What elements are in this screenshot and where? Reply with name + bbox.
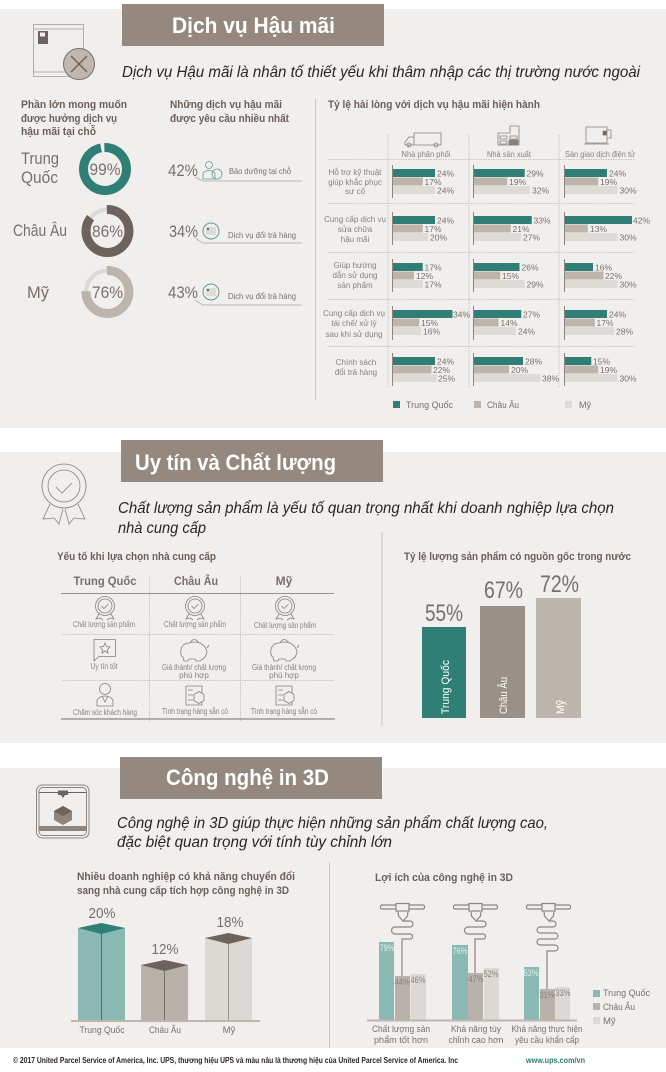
row: usage guidance: 22%	[605, 271, 622, 281]
subheading: benefits: Lợi ích của công nghệ in 3D	[375, 872, 513, 884]
group: better customization: 52%	[484, 969, 499, 980]
intro text: Chất lượng sản phẩm là yếu tố quan trọng nhất khi doanh nghiệp lựa chọn	[118, 499, 614, 517]
row 2 labels: Giá thành/ chất lượng	[252, 663, 316, 672]
legend	[393, 400, 591, 410]
subheading: on-site service preference: được hưởng dịch vụ	[21, 113, 117, 125]
group: better customization: chỉnh cao hơn	[448, 1035, 504, 1045]
row: recycling: 14%	[500, 318, 518, 328]
row: return policy: 24%	[437, 356, 454, 366]
subheading: switching suppliers	[77, 871, 295, 897]
row 3 labels: Tình trạng hàng sẵn có	[251, 707, 317, 716]
row: return policy: 38%	[542, 374, 559, 384]
bar chart: domestic sourcing	[404, 551, 631, 718]
donut: Trung Quốc 99%	[21, 148, 126, 190]
icon: 3D printer	[36, 785, 89, 838]
row: repair service: 17%	[424, 224, 442, 234]
row 3 labels: Tình trạng hàng sẵn có	[162, 707, 228, 716]
column headers: Mỹ	[276, 574, 293, 588]
icon: quality medal	[42, 464, 86, 524]
row: repair service: 21%	[512, 224, 530, 234]
group: better product quality: 46%	[410, 975, 426, 986]
row: repair service: 33%	[534, 216, 551, 226]
row: usage guidance: 17%	[424, 262, 442, 272]
icon: piggy bank	[181, 640, 209, 661]
footer website: www.ups.com/vn	[525, 1056, 585, 1065]
bar: Mỹ 18%: 18%	[216, 914, 244, 931]
row: return policy: 28%	[525, 356, 542, 366]
row 2 labels: phù hợp	[269, 671, 299, 680]
icon: piggy bank	[271, 640, 299, 661]
row: recycling: 24%	[518, 326, 535, 336]
row: recycling: 17%	[596, 318, 614, 328]
group: urgent requests: yêu cầu khẩn cấp	[515, 1035, 579, 1045]
row: usage guidance: 29%	[526, 280, 544, 290]
heading: 3D printing	[120, 757, 382, 799]
row: return policy: 25%	[438, 374, 455, 384]
column headers: Châu Âu	[174, 573, 218, 588]
subheading: selection factors: Yếu tố khi lựa chọn nhà cung cấp	[57, 551, 216, 563]
row: technical support: 24%	[437, 168, 454, 178]
row 2 labels: Uy tín tốt	[90, 662, 118, 671]
row: usage guidance: Giúp hướng	[333, 261, 377, 270]
icon: box with tools	[34, 24, 94, 80]
bar chart: switching suppliers	[71, 871, 295, 1036]
donut: Mỹ 76%: 76%	[92, 283, 123, 302]
row: technical support: 32%	[532, 186, 549, 196]
row: usage guidance: 12%	[416, 271, 433, 281]
bar: Trung Quốc 55%: Trung Quốc	[440, 660, 452, 714]
icon: checklist with box	[276, 686, 294, 705]
group: urgent requests: 33%	[556, 988, 571, 999]
donut: Trung Quốc 99%: Trung	[21, 149, 59, 168]
bar: Châu Âu 67%: 67%	[484, 577, 523, 604]
row 2 labels	[90, 662, 316, 680]
bar: Mỹ 72%: Mỹ	[555, 700, 567, 714]
row: recycling: 27%	[523, 310, 540, 320]
intro text: nhà cung cấp	[118, 520, 206, 537]
selection factors table	[57, 551, 335, 722]
row: technical support: 19%	[509, 177, 526, 187]
intro text: Dịch vụ Hậu mãi là nhân tố thiết yếu khi thâm nhập các thị trường nước ngoài	[122, 64, 640, 81]
satisfaction matrix	[323, 99, 650, 410]
stat: 34% return service: Dịch vụ đổi trả hàng	[228, 231, 296, 240]
donut: Mỹ 76%	[27, 270, 129, 314]
subheading: domestic sourcing: Tỷ lệ lượng sản phẩm có nguồn gốc trong nước	[404, 551, 631, 563]
subheading: switching suppliers: sang nhà cung cấp tích hợp công nghệ in 3D	[77, 885, 289, 897]
row: usage guidance: sản phẩm	[337, 281, 373, 290]
icon: medal	[96, 596, 114, 620]
row: repair service: 27%	[523, 232, 540, 242]
footer copyright: © 2017 United Parcel Service of America, Inc. UPS, thương hiệu UPS và màu nâu là thương hiệu của United Parcel Service of America. Inc	[13, 1056, 458, 1065]
intro text	[117, 814, 548, 851]
group: better customization: 47%	[468, 974, 484, 985]
legend: Trung Quốc	[603, 988, 650, 999]
stat: 43% return service	[168, 283, 302, 305]
icon: monitor	[584, 127, 611, 144]
legend: Trung Quốc	[406, 400, 453, 410]
subheading: most requested services: được yêu cầu nhiều nhất	[170, 113, 289, 125]
row: recycling: 34%	[453, 310, 470, 320]
heading: reputation and quality: Uy tín và Chất lượng	[135, 450, 336, 475]
heading: after-sales service	[122, 4, 384, 46]
group: better customization: Khả năng tùy	[451, 1024, 501, 1034]
row: technical support: 24%	[437, 186, 454, 196]
row: recycling: 24%	[609, 310, 626, 320]
row: return policy: 20%	[511, 365, 528, 375]
row 1 labels: Chất lượng sản phẩm	[164, 620, 226, 629]
bar: Trung Quốc 55%: 55%	[425, 600, 463, 627]
legend	[593, 988, 650, 1027]
row: return policy: 15%	[593, 356, 610, 366]
column headers	[74, 573, 293, 588]
stat: 43% return service: 43%	[168, 283, 198, 302]
row: return policy: đổi trả hàng	[335, 368, 377, 377]
row: technical support: 24%	[609, 168, 626, 178]
stat: 34% return service	[169, 222, 302, 243]
bar chart: benefits of 3D printing	[367, 872, 650, 1045]
icon: medal	[186, 596, 204, 620]
row: repair service: hậu mãi	[341, 235, 369, 244]
group: better customization	[448, 904, 504, 1045]
intro text	[118, 499, 614, 537]
row: usage guidance: dẫn sử dụng	[333, 271, 377, 280]
heading: 3D printing: Công nghệ in 3D	[166, 765, 329, 790]
row: return policy	[335, 353, 637, 386]
bar: Châu Âu 67%: Châu Âu	[497, 677, 510, 714]
row: repair service: 13%	[590, 224, 607, 234]
group: urgent requests: 31%	[540, 990, 555, 1001]
row: repair service: 30%	[620, 232, 637, 242]
bar: Mỹ 72%	[536, 571, 581, 718]
row: usage guidance: 15%	[502, 271, 519, 281]
row 1 labels: Chất lượng sản phẩm	[254, 621, 316, 630]
bar: Trung Quốc 55%	[422, 600, 466, 718]
group: better product quality: Chất lượng sản	[372, 1024, 430, 1034]
row 1 labels	[73, 620, 316, 630]
row 3 labels	[73, 707, 317, 717]
row: recycling: Cung cấp dịch vụ	[323, 309, 385, 318]
row: technical support	[328, 165, 637, 198]
column headers: Nhà sản xuất	[487, 150, 532, 159]
stat: 42% on-site maintenance: Bảo dưỡng tại chỗ	[229, 167, 292, 176]
group: better product quality: 44%	[394, 977, 410, 988]
bar: Trung Quốc 20%: Trung Quốc	[80, 1025, 125, 1036]
row: return policy: 19%	[600, 365, 617, 375]
donut: Châu Âu 86%: 86%	[92, 222, 123, 241]
row: recycling: tái chế/ xử lý	[331, 319, 377, 328]
row: repair service: 42%	[633, 216, 650, 226]
row: technical support: Hỗ trợ kỹ thuật	[329, 168, 382, 177]
icon: checklist with box	[186, 686, 204, 705]
group: urgent requests: Khả năng thực hiện	[512, 1024, 582, 1034]
legend: Mỹ	[603, 1016, 616, 1027]
row: technical support: giúp khắc phục	[328, 178, 382, 187]
icon: factory	[498, 126, 519, 145]
subheading: most requested services	[170, 99, 289, 125]
donut: Trung Quốc 99%: 99%	[90, 160, 120, 179]
row: usage guidance	[333, 259, 637, 292]
bar: Châu Âu 67%	[480, 577, 525, 718]
subheading: switching suppliers: Nhiều doanh nghiệp có khả năng chuyển đổi	[77, 871, 295, 883]
row 2 labels: Giá thành/ chất lượng	[162, 663, 226, 672]
row: usage guidance: 26%	[522, 262, 539, 272]
donut: Trung Quốc 99%: Quốc	[21, 168, 58, 187]
row 1 labels: Chất lượng sản phẩm	[73, 620, 135, 629]
row: recycling: 28%	[616, 326, 633, 336]
row: usage guidance: 16%	[595, 262, 612, 272]
subheading: most requested services: Những dịch vụ hậu mãi	[170, 99, 282, 111]
row: repair service: Cung cấp dịch vụ	[324, 215, 386, 224]
row: repair service	[324, 212, 650, 245]
column headers	[402, 150, 636, 159]
row: technical support: sự cố	[345, 187, 366, 196]
legend: Châu Âu	[603, 1002, 635, 1013]
column headers: Trung Quốc	[74, 574, 137, 588]
icon: customer care person	[97, 684, 113, 706]
row 3 labels: Chăm sóc khách hàng	[73, 708, 137, 717]
legend: Châu Âu	[487, 400, 519, 410]
group: better product quality	[372, 904, 430, 1045]
group: better customization: 76%	[452, 946, 468, 957]
column headers: Nhà phân phối	[402, 150, 451, 159]
row: return policy: 22%	[433, 365, 450, 375]
row: recycling	[323, 306, 633, 340]
row: usage guidance: 17%	[424, 280, 442, 290]
subheading: on-site service preference: hậu mãi tại chỗ	[21, 125, 96, 138]
subheading: on-site service preference: Phần lớn mong muốn	[21, 99, 127, 111]
stat: 42% on-site maintenance: 42%	[168, 161, 198, 180]
donut: Châu Âu 86%: Châu Âu	[13, 221, 67, 240]
bar: Mỹ 18%: Mỹ	[223, 1025, 236, 1036]
row: technical support: 17%	[424, 177, 442, 187]
group: urgent requests	[512, 904, 582, 1045]
stat: 34% return service: 34%	[169, 222, 198, 241]
bar: Trung Quốc 20%	[78, 905, 125, 1036]
legend: Mỹ	[579, 400, 591, 410]
group: better product quality: 79%	[380, 943, 395, 954]
column headers: Sàn giao dịch điện tử	[565, 150, 636, 159]
row: technical support: 19%	[600, 177, 617, 187]
group: better product quality: phẩm tốt hơn	[374, 1035, 428, 1045]
row: usage guidance: 30%	[620, 280, 637, 290]
icon: truck	[405, 133, 441, 147]
row: technical support: 30%	[620, 186, 637, 196]
subheading: on-site service preference	[21, 99, 127, 138]
bar: Châu Âu 12%: 12%	[152, 941, 178, 958]
row: recycling: sau khi sử dụng	[326, 330, 382, 339]
stat: 42% on-site maintenance	[168, 161, 302, 181]
row: return policy: Chính sách	[336, 358, 376, 367]
row: technical support: 29%	[526, 168, 544, 178]
bar: Châu Âu 12%: Châu Âu	[149, 1025, 181, 1036]
row: recycling: 16%	[423, 326, 440, 336]
panel: 3D printing	[0, 757, 666, 1048]
heading: after-sales service: Dịch vụ Hậu mãi	[172, 13, 335, 38]
row: repair service: 20%	[430, 232, 447, 242]
donut: Châu Âu 86%	[13, 210, 129, 252]
intro text: Công nghệ in 3D giúp thực hiện những sản phẩm chất lượng cao,	[117, 814, 548, 832]
stat: 43% return service: Dịch vụ đổi trả hàng	[228, 292, 296, 301]
row: return policy: 30%	[620, 374, 637, 384]
bar: Mỹ 18%	[205, 914, 252, 1036]
group: urgent requests: 53%	[524, 968, 539, 979]
row: repair service: 24%	[437, 216, 454, 226]
row: repair service: sửa chữa	[338, 225, 373, 234]
donut: Mỹ 76%: Mỹ	[27, 283, 49, 302]
bar: Mỹ 72%: 72%	[540, 571, 579, 598]
bar: Trung Quốc 20%: 20%	[88, 905, 116, 922]
panel: after-sales service	[0, 4, 666, 428]
heading: reputation and quality	[121, 440, 383, 482]
icon: star speech bubble	[94, 640, 116, 661]
bar: Châu Âu 12%	[141, 941, 188, 1036]
icon: medal	[276, 596, 294, 620]
panel: reputation and quality	[0, 440, 666, 743]
intro text: đặc biệt quan trọng với tính tùy chỉnh lớn	[117, 834, 392, 851]
subheading: satisfaction: Tỷ lệ hài lòng với dịch vụ hậu mãi hiện hành	[328, 99, 540, 111]
row: recycling: 15%	[421, 318, 438, 328]
row 2 labels: phù hợp	[179, 671, 209, 680]
